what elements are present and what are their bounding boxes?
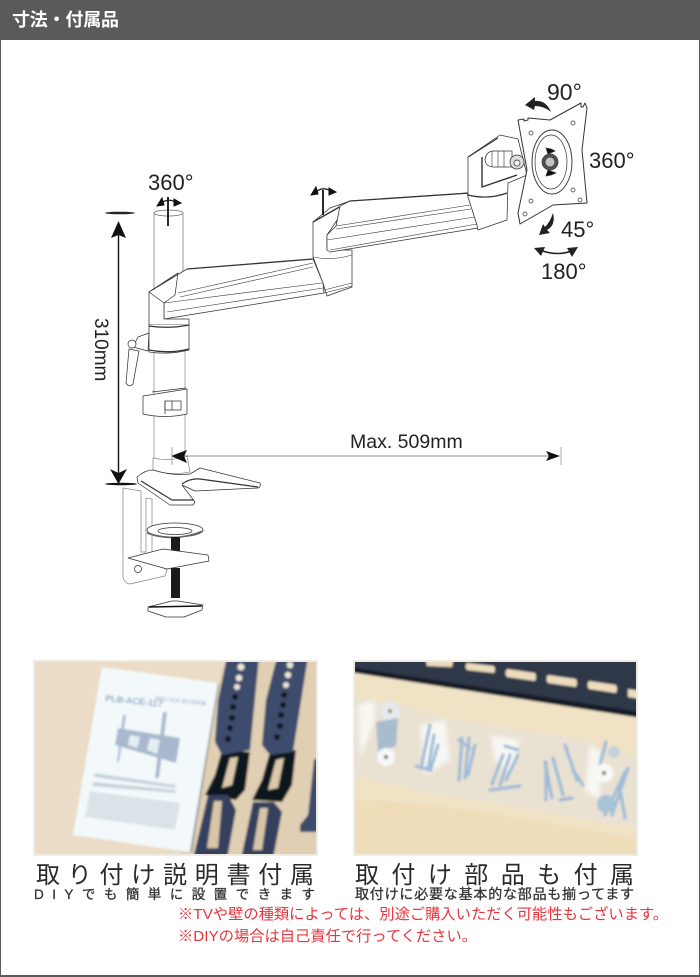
manual sheet [73, 667, 219, 852]
caption left [34, 862, 315, 902]
reach label: Max. 509mm [350, 431, 463, 453]
manual bracket drawing [115, 712, 180, 778]
bottom border [0, 975, 700, 977]
metal strap left [193, 657, 259, 859]
plastic bag [350, 697, 641, 828]
screw packs [416, 725, 628, 818]
title: 寸法・付属品 [12, 10, 119, 30]
large washer [594, 764, 614, 782]
photo: instruction manual [30, 657, 321, 859]
red note one: ※TVや壁の種類によっては、別途ご購入いただく可能性もございます。 [178, 905, 668, 923]
pole collar [149, 292, 189, 353]
rotation icon second joint [311, 187, 336, 215]
caption heading left: 取り付け説明書付属 [36, 862, 314, 889]
height dimension [105, 212, 137, 485]
upper pole [154, 210, 183, 290]
manual sheet: 壁掛け金具 取付説明書 [155, 695, 207, 707]
arm one [149, 259, 324, 319]
wood tone [35, 662, 224, 854]
caption heading right: 取付け部品も付属 [355, 862, 634, 889]
reach dimension [171, 447, 561, 465]
washer cluster [597, 795, 615, 813]
clamp upper disc [147, 523, 203, 538]
label 360 degrees: 360° [589, 148, 635, 173]
height label: 310mm [90, 318, 111, 381]
manual body text [85, 773, 180, 830]
reach head right [546, 451, 560, 461]
manual model name: PLB-ACE-117 [105, 693, 163, 709]
top cap [105, 212, 135, 214]
reach head left [171, 450, 187, 463]
wood surface [355, 670, 636, 840]
arrow head up [111, 221, 126, 238]
reach line [175, 455, 558, 457]
clamp body [123, 488, 167, 584]
clamp screw lower [171, 568, 180, 598]
bottom cap [105, 483, 137, 485]
caption right [355, 862, 634, 902]
clamp hand knob [148, 601, 203, 617]
second pivot joint [313, 201, 352, 296]
arm two [327, 193, 478, 252]
caption sub right: 取付けに必要な基本的な部品も揃ってます [355, 886, 634, 902]
strap fragment [298, 757, 316, 834]
label 45 degrees: 45° [561, 217, 594, 242]
arrow 45 degrees [539, 213, 554, 235]
arrow 90 degrees [525, 97, 551, 112]
dark rail [350, 657, 641, 718]
dark linkage right [252, 750, 296, 802]
caption sub left: DIYでも簡単に設置できます [34, 887, 315, 902]
arrow line [118, 224, 120, 482]
clamp screw upper [171, 537, 180, 557]
clamp lower plate [128, 549, 209, 569]
clamping lever [126, 333, 149, 386]
washer pack [376, 701, 400, 766]
photo: mounting hardware [350, 657, 641, 859]
lower pole [154, 350, 185, 468]
red note two: ※DIYの場合は自己責任で行ってください。 [178, 928, 477, 945]
monitor arm diagram [123, 103, 587, 617]
dark linkage left [205, 750, 250, 800]
arrow head down [110, 469, 127, 484]
header bar [0, 0, 700, 40]
arrow 180 degrees [534, 247, 578, 257]
rotation label pole: 360° [148, 170, 194, 195]
head joint [468, 135, 527, 230]
rotation icon pole [157, 197, 181, 226]
label 90 degrees: 90° [547, 79, 582, 105]
metal strap right [241, 657, 308, 859]
desk base foot [137, 456, 260, 505]
VESA mounting plate [518, 103, 587, 224]
label 180 degrees: 180° [541, 259, 587, 284]
pole ring clamp [143, 388, 187, 416]
